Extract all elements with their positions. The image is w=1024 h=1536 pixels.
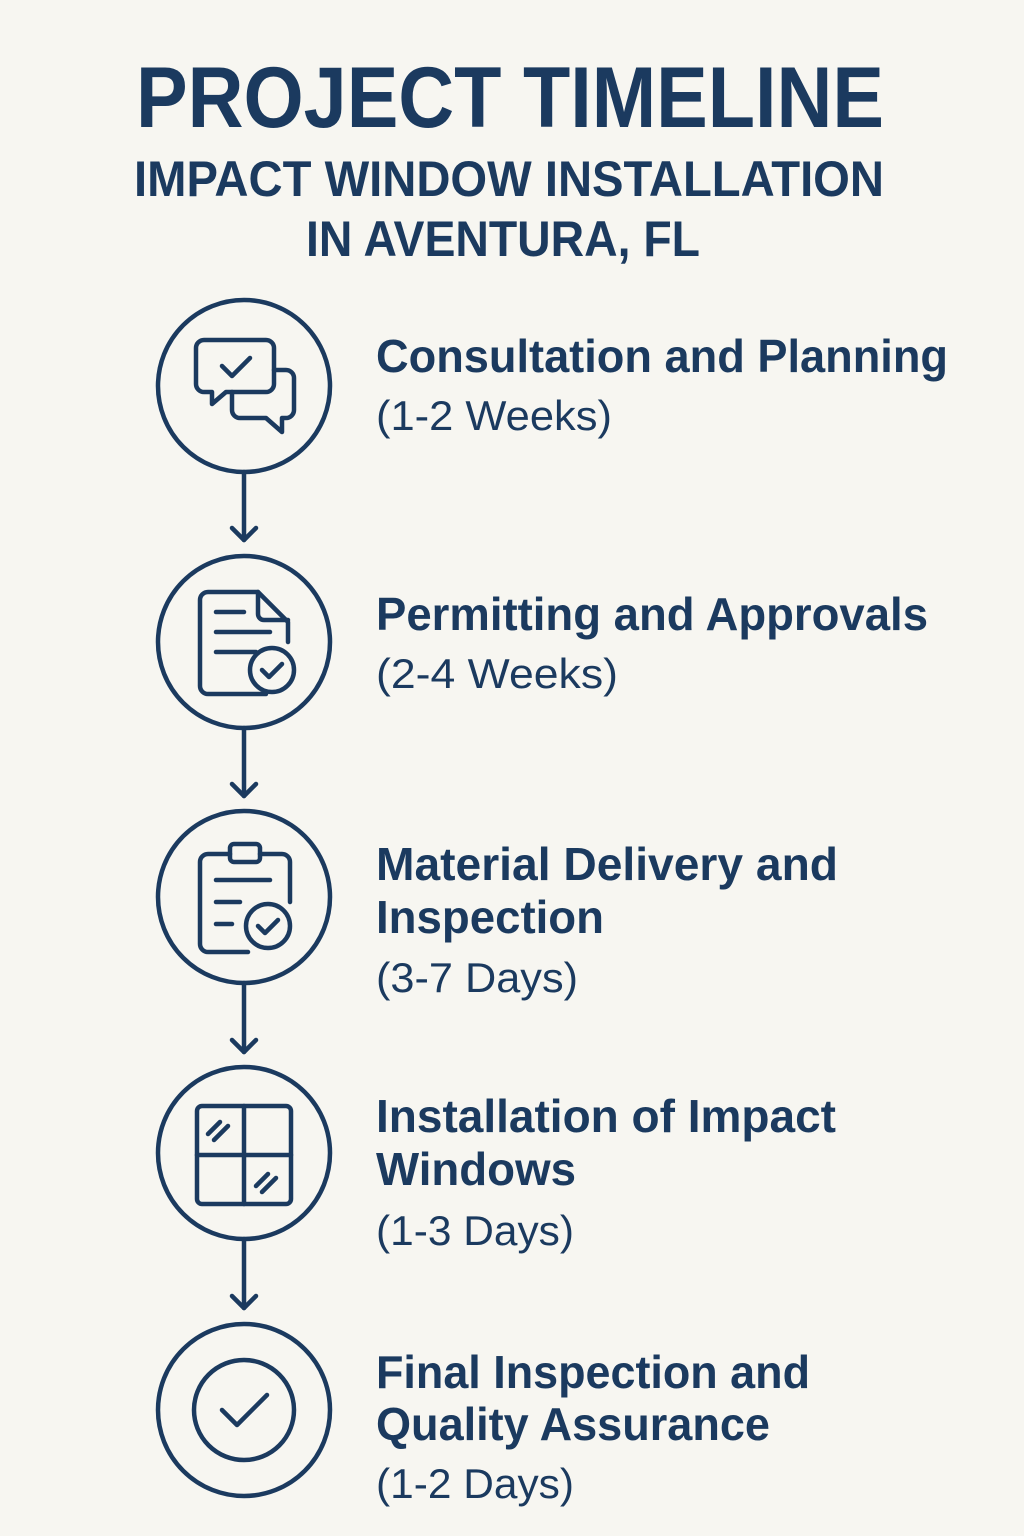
subtitle: IMPACT WINDOW INSTALLATION: [134, 151, 884, 207]
step 1 text: (1-2 Weeks): [376, 392, 612, 439]
step 3 circle: clipboard icon: [158, 811, 330, 983]
step 1 circle: consultation icon: [158, 300, 330, 472]
step 5 text: Quality Assurance: [376, 1398, 770, 1450]
step 5 text: Final Inspection and: [376, 1346, 810, 1398]
subtitle: [134, 151, 884, 267]
step 2 text: [376, 588, 928, 697]
step 3 text: (3-7 Days): [376, 954, 578, 1001]
arrow 1: [232, 472, 256, 540]
step 2 text: (2-4 Weeks): [376, 650, 618, 697]
step 5 circle: check icon: [158, 1324, 330, 1496]
title: [134, 50, 884, 267]
step 5 text: [376, 1346, 810, 1507]
step 2 circle: permit document icon: [158, 556, 330, 728]
step 4 circle: window icon: [158, 1067, 330, 1239]
arrow 4: [232, 1239, 256, 1308]
step 3 text: Inspection: [376, 891, 604, 943]
timeline: [158, 300, 330, 1496]
step 4 text: [376, 1090, 836, 1254]
step 4 text: Windows: [376, 1143, 576, 1195]
step 3 text: [376, 838, 838, 1001]
step 1 text: [376, 330, 948, 439]
step 1 text: Consultation and Planning: [376, 330, 948, 382]
step 5 text: (1-2 Days): [376, 1460, 574, 1507]
step 4 text: Installation of Impact: [376, 1090, 836, 1142]
title: PROJECT TIMELINE: [136, 50, 884, 146]
arrow 3: [232, 983, 256, 1052]
step 3 text: Material Delivery and: [376, 838, 838, 890]
subtitle: IN AVENTURA, FL: [306, 211, 700, 267]
arrow 2: [232, 728, 256, 796]
step 4 text: (1-3 Days): [376, 1207, 574, 1254]
step 2 text: Permitting and Approvals: [376, 588, 928, 640]
